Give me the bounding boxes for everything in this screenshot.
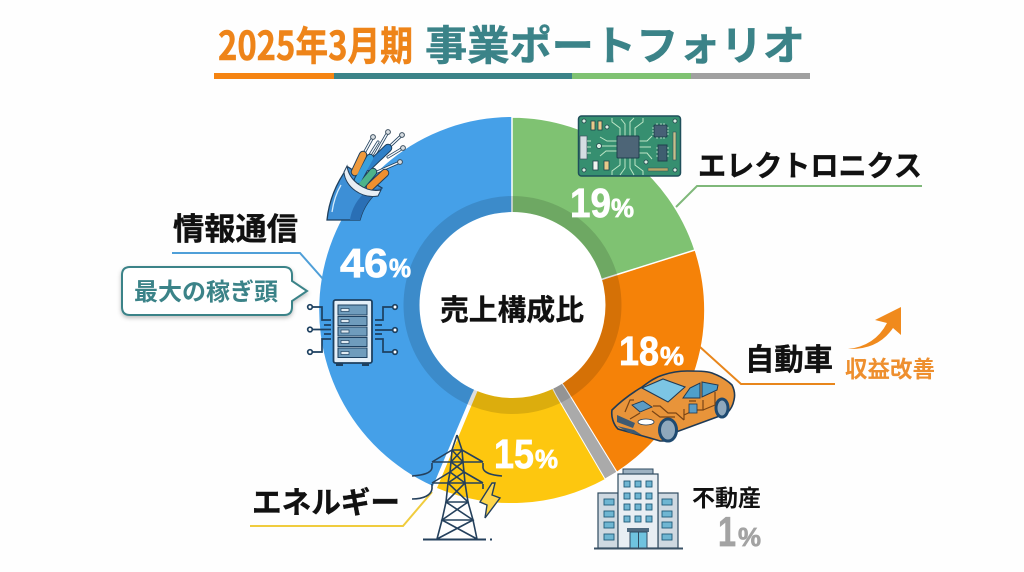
percent: real estate 1%: 1 [718, 508, 736, 555]
label: energy: エネルギー [252, 478, 400, 522]
callout: biggest earner [122, 267, 307, 315]
fibre strands [355, 132, 403, 187]
label: information and communications [172, 204, 323, 279]
label: electronics [676, 143, 922, 207]
segment: information and communications 46% [319, 117, 512, 486]
title colour bar [214, 73, 810, 79]
icon: car with circuitry [612, 371, 735, 441]
percent: 18%: 18 [619, 328, 659, 374]
icon: circuit board [578, 116, 680, 176]
title: 事業ポートフォリオ [425, 12, 805, 72]
title: 2025年3月期 [218, 14, 413, 72]
percent: 46%: % [389, 253, 411, 283]
segment: real estate 1% [512, 310, 617, 479]
percent: 46%: 46 [340, 240, 388, 286]
percent: real estate 1% [718, 508, 761, 555]
label: profit improvement: 収益改善 [845, 350, 935, 384]
centre label: 売上構成比 [440, 287, 584, 329]
percent: 46% [340, 240, 411, 286]
segment: automotive 18% [512, 250, 705, 472]
icon: fibre optic cable [327, 130, 405, 220]
centre hole [420, 212, 606, 398]
segment: energy 15% [437, 310, 605, 503]
label: real estate: 不動産 [692, 479, 761, 513]
percent: 19%: 19 [570, 180, 611, 226]
icon: server rack [308, 300, 397, 366]
label: electronics: エレクトロニクス [698, 143, 922, 185]
label: automotive: 自動車 [745, 335, 833, 379]
inner shaded ring [412, 204, 614, 406]
icon: office building [594, 469, 683, 548]
donut chart [319, 117, 705, 503]
percent: 18%: % [660, 341, 684, 371]
percent: 15%: % [535, 444, 558, 474]
arrow: profit improvement [848, 307, 901, 349]
label: automotive [700, 335, 835, 384]
percent: 15%: 15 [494, 431, 534, 477]
icon: lightning bolt [480, 483, 500, 518]
percent: real estate 1%: % [738, 522, 761, 552]
callout: biggest earner: 最大の稼ぎ頭 [134, 272, 278, 307]
title [218, 12, 805, 72]
segment: electronics 19% [512, 117, 695, 310]
percent: 19%: % [611, 193, 634, 223]
icon: transmission tower [412, 435, 502, 540]
label: information and communications: 情報通信 [173, 204, 298, 249]
